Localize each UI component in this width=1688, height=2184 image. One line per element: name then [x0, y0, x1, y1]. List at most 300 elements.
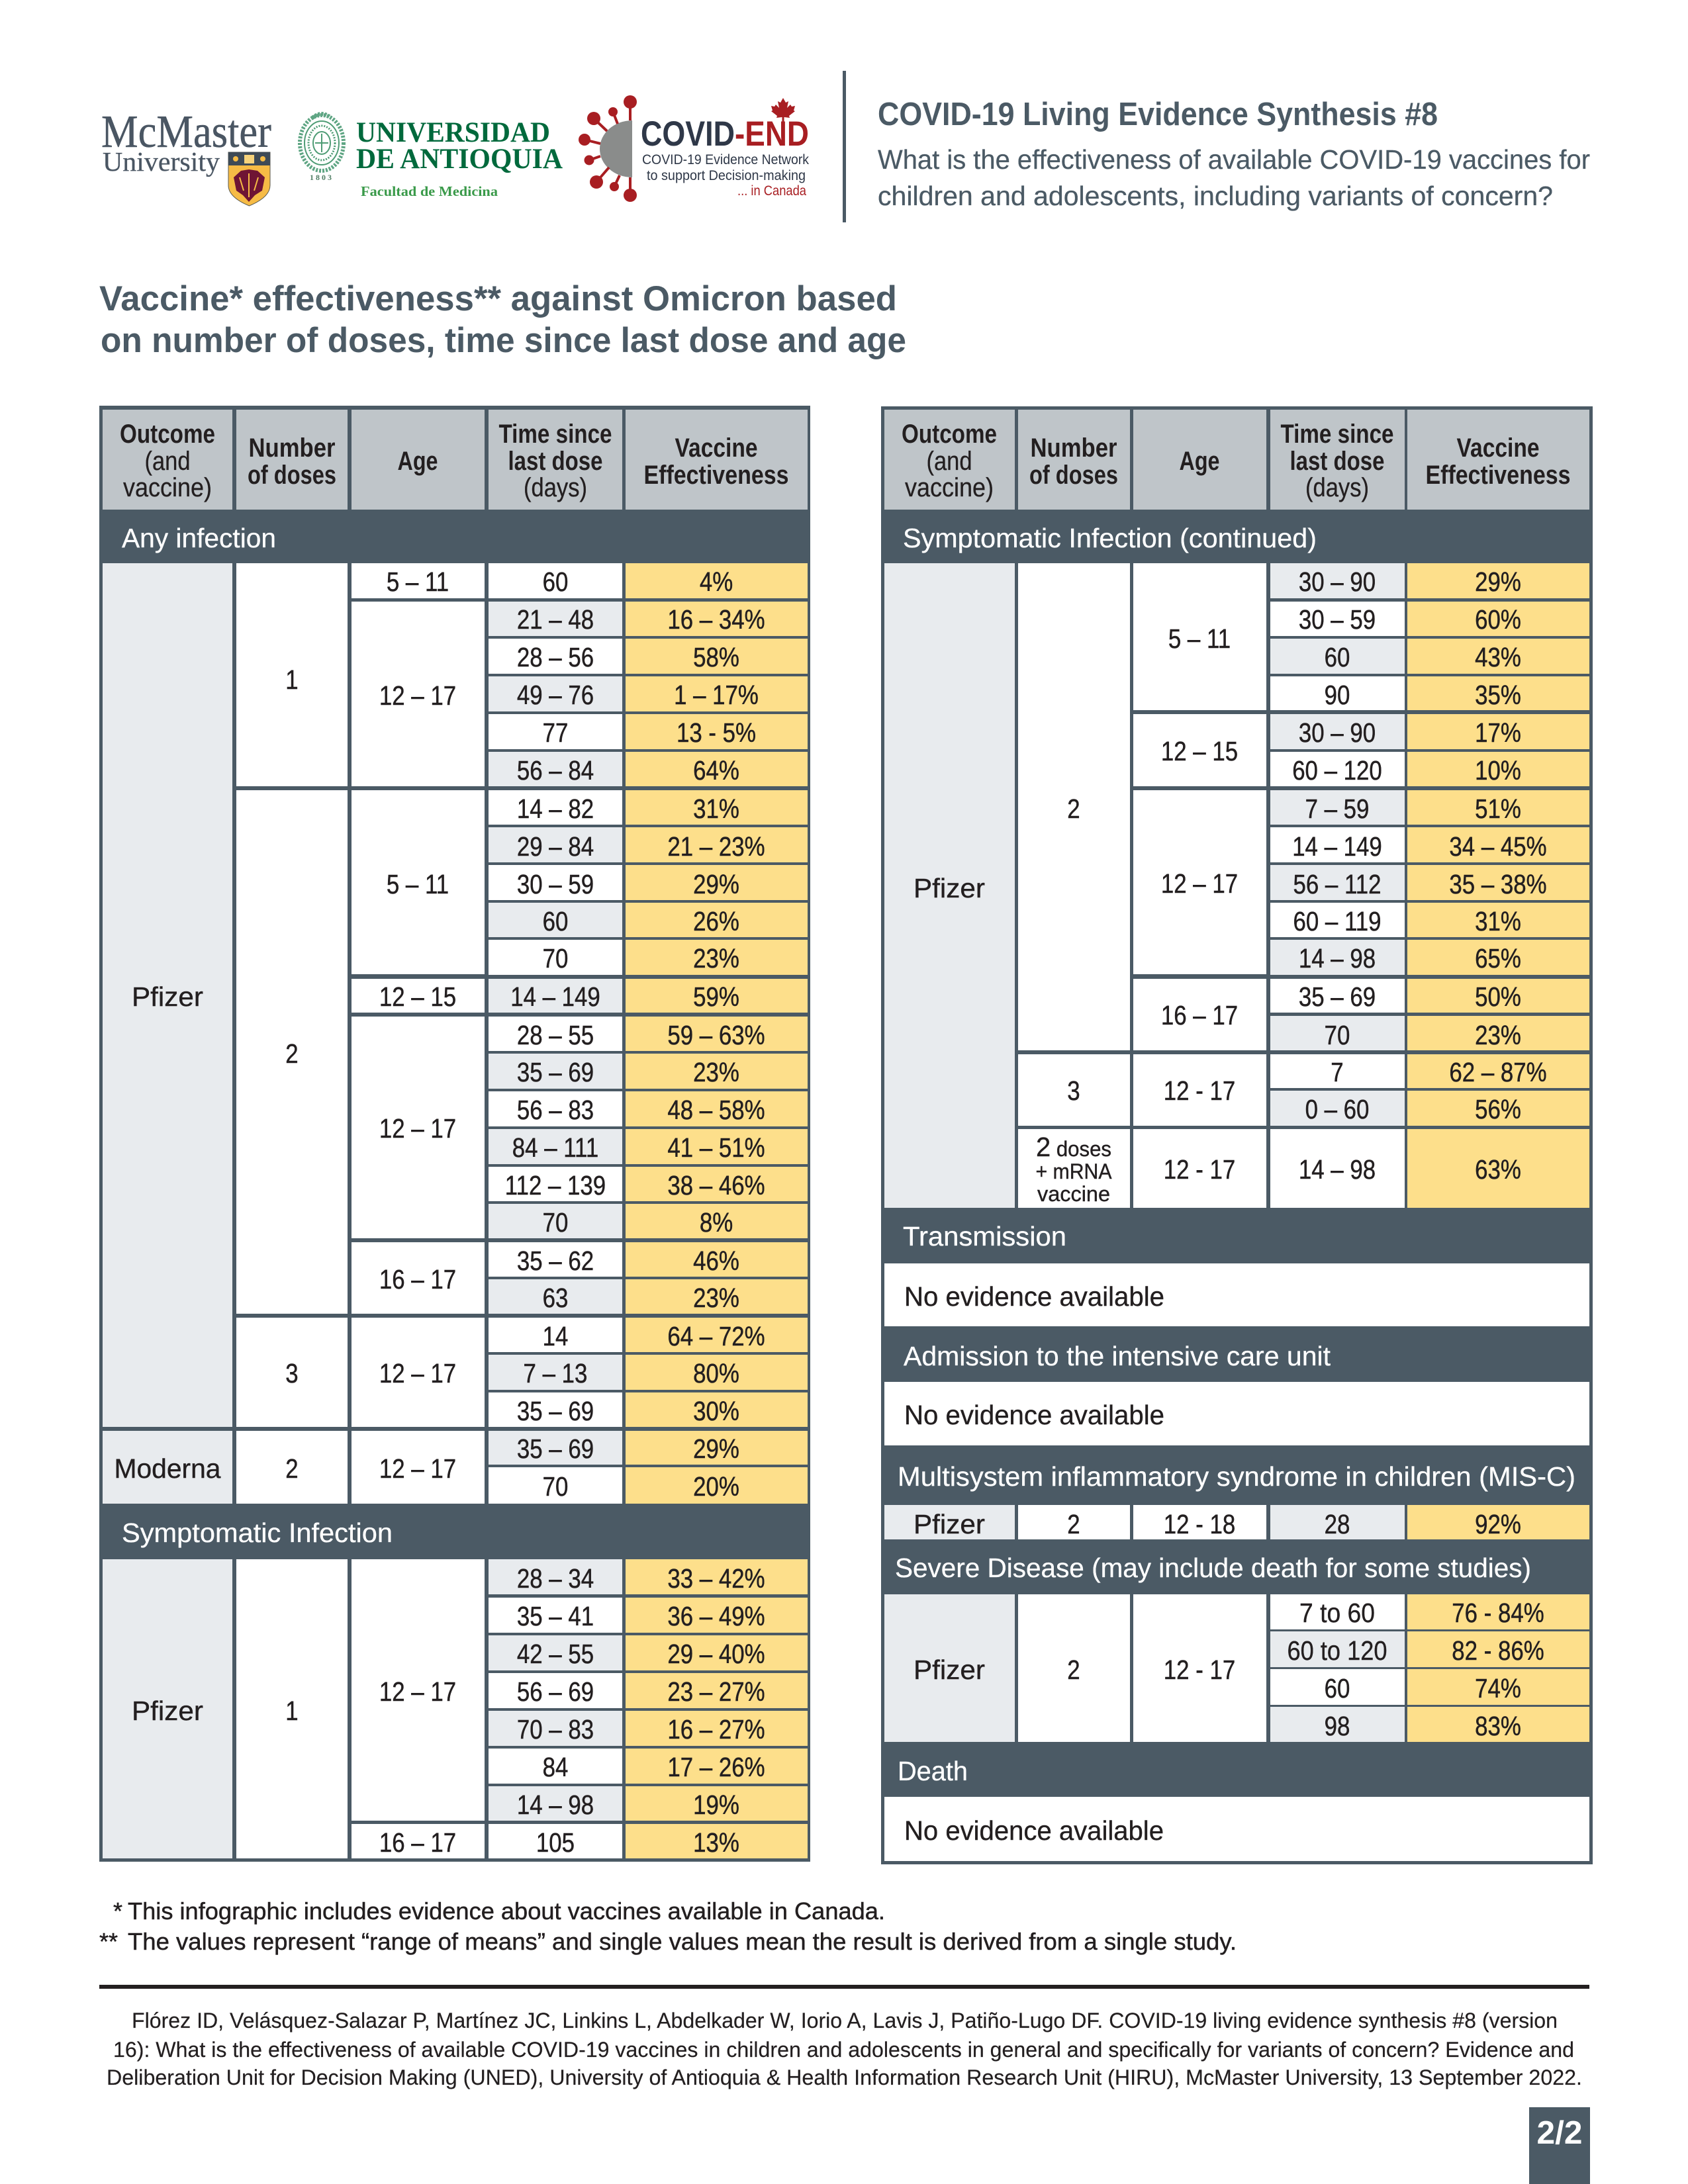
- doses cell: 2: 2: [285, 1039, 299, 1069]
- doses cell: 2 doses + mRNA vaccine: [1018, 1129, 1130, 1208]
- row: 14 – 98 days, 65%: [1270, 940, 1589, 975]
- age cell: 12 – 17: [352, 1318, 485, 1427]
- row: 14 – 149 days, 59%: [489, 979, 808, 1013]
- row: MIS-C Pfizer, 2 doses, 12 - 18, 28 days, 92%: 92%: [1475, 1510, 1521, 1540]
- age cell: 12 – 17: [352, 1017, 485, 1238]
- no evidence: transmission: [884, 1263, 1589, 1326]
- row: 35 – 69 days, 23%: [489, 1054, 808, 1089]
- table header row: (and: [144, 447, 191, 476]
- main heading: [99, 279, 906, 360]
- no evidence: transmission: No evidence available: [904, 1281, 1164, 1312]
- row: 7 to 60 days, 76 - 84%: 76 - 84%: [1452, 1598, 1544, 1629]
- row: 30 – 59 days, 29%: [489, 865, 808, 900]
- row: 7 – 59 days, 51%: [1270, 790, 1589, 825]
- row: 60 days, 43%: 43%: [1475, 643, 1521, 673]
- table header row: of doses: [248, 461, 336, 490]
- row: 14 – 82 days, 31%: [489, 790, 808, 825]
- doses cell: 2 doses + mRNA vaccine: vaccine: [1037, 1182, 1110, 1206]
- doses cell: 1: [236, 563, 348, 786]
- no evidence: death: [884, 1797, 1589, 1861]
- row: 35 – 69 days, 30%: [489, 1392, 808, 1427]
- row: 70 – 83 days, 16 – 27%: [489, 1711, 808, 1746]
- table header row: [103, 410, 808, 510]
- row: 35 – 69 days, 30%: 35 – 69: [517, 1396, 594, 1427]
- logo: COVID-END: ... in Canada: [737, 183, 806, 199]
- logo: Universidad de Antioquia: Facultad de Medicina: [361, 183, 498, 199]
- section band: Symptomatic Infection (continued): Symptomatic Infection (continued): [903, 523, 1317, 553]
- row: 35 – 41 days, 36 – 49%: 35 – 41: [517, 1602, 594, 1632]
- row: 28 – 55 days, 59 – 63%: 28 – 55: [517, 1021, 594, 1051]
- row: 14 – 82 days, 31%: 14 – 82: [517, 794, 594, 825]
- section band: Transmission: Transmission: [903, 1221, 1066, 1251]
- age cell: 12 – 15: [352, 979, 485, 1013]
- row: 60 to 120 days, 82 - 86%: [1270, 1631, 1589, 1667]
- age cell: 16 – 17: [352, 1824, 485, 1858]
- no evidence: ICU admission: No evidence available: [904, 1400, 1164, 1430]
- logo: McMaster University: University: [103, 146, 220, 177]
- row: 60 – 120 days, 10%: 60 – 120: [1292, 756, 1382, 786]
- row: 7 to 60 days, 76 - 84%: [1270, 1594, 1589, 1629]
- citation: 16): What is the effectiveness of available COVID-19 vaccines in children and adolescents in general and specifically for variants of concern? Evidence and: [113, 2038, 1574, 2062]
- doses cell: 3: [1018, 1054, 1130, 1126]
- doses cell: 2: [1018, 1594, 1130, 1742]
- doses cell: 2: 2: [1067, 794, 1080, 825]
- row: 60 days, 43%: 60: [1325, 643, 1350, 673]
- section band: Death: Death: [898, 1756, 968, 1786]
- panel: right table: [881, 406, 1593, 1864]
- row: 70 days, 23%: [1270, 1016, 1589, 1051]
- table header row: [884, 410, 1589, 510]
- age cell: 5 – 11: [352, 563, 485, 598]
- age cell: 16 – 17: 16 – 17: [379, 1828, 456, 1858]
- outcome cell: Pfizer, symptomatic: [103, 1559, 232, 1858]
- row: 29 – 84 days, 21 – 23%: [489, 827, 808, 862]
- row: 60 to 120 days, 82 - 86%: 82 - 86%: [1452, 1636, 1544, 1666]
- table header row: (and: [927, 447, 972, 476]
- section band: Admission to the intensive care unit: Admission to the intensive care unit: [904, 1341, 1331, 1371]
- row: 70 days, 23%: 70: [543, 944, 568, 974]
- outcome cell: Pfizer, any infection: Pfizer: [132, 981, 203, 1012]
- doses cell: 2: [1018, 563, 1130, 1050]
- doses cell: 1: 1: [285, 665, 299, 696]
- row: Moderna 35 – 69 days, 29%: [489, 1431, 808, 1465]
- doses cell: 2 doses + mRNA vaccine: + mRNA: [1035, 1160, 1112, 1183]
- row: 60 – 119 days, 31%: [1270, 903, 1589, 937]
- row: 60 days, 74%: 74%: [1475, 1674, 1521, 1704]
- row: 60 days, 26%: [489, 903, 808, 937]
- row: 63 days, 23%: 63: [543, 1283, 568, 1314]
- row: 30 – 90 days, 17%: 30 – 90: [1299, 718, 1376, 749]
- row: 49 – 76 days, 1 – 17%: 1 – 17%: [674, 680, 759, 711]
- row: 35 – 62 days, 46%: [489, 1242, 808, 1277]
- section band: Severe Disease: Severe Disease (may include death for some studies): [895, 1553, 1531, 1583]
- row: 35 – 69 days, 30%: 30%: [693, 1396, 739, 1427]
- table header row: (days): [524, 473, 587, 502]
- doses cell: 1: [236, 1559, 348, 1858]
- row: 14 – 149 days, 34 – 45%: 34 – 45%: [1449, 832, 1547, 862]
- row: Moderna 35 – 69 days, 29%: 29%: [693, 1434, 739, 1465]
- row: 56 – 69 days, 23 – 27%: 23 – 27%: [667, 1677, 765, 1707]
- row: 70 days, 8%: 8%: [700, 1208, 733, 1238]
- page number badge: 2/2: [1537, 2115, 1582, 2151]
- table header row: vaccine): [123, 473, 212, 502]
- row: 7 days, 62 – 87%: 7: [1331, 1058, 1344, 1088]
- header: synthesis title and question: [878, 97, 1590, 211]
- no evidence: ICU admission: [884, 1382, 1589, 1445]
- row: 14 – 98 days, 65%: 14 – 98: [1299, 944, 1376, 974]
- row: 14 – 98 days, 65%: 65%: [1475, 944, 1521, 974]
- doses cell: Moderna 2: [236, 1431, 348, 1504]
- section band: Any infection: Any infection: [122, 523, 276, 553]
- row: 7 – 59 days, 51%: 51%: [1475, 794, 1521, 825]
- doses cell: 3: [236, 1318, 348, 1427]
- row: 0 – 60 days, 56%: 0 – 60: [1305, 1095, 1369, 1125]
- table header row: Effectiveness: [1426, 461, 1570, 490]
- row: 56 – 83 days, 48 – 58%: 56 – 83: [517, 1095, 594, 1126]
- row: 84 – 111 days, 41 – 51%: 41 – 51%: [667, 1133, 765, 1163]
- footnotes: The values represent “range of means” and single values mean the result is derived from a single study.: [128, 1928, 1237, 1955]
- section band: Symptomatic Infection: Symptomatic Infection: [122, 1518, 393, 1548]
- age cell: 12 – 15: 12 – 15: [379, 982, 456, 1013]
- row: 112 – 139 days, 38 – 46%: 112 – 139: [505, 1171, 606, 1201]
- age cell: 12 – 17: [1133, 1054, 1266, 1126]
- outcome cell: Pfizer, any infection: [103, 563, 232, 1427]
- outcome cell: Moderna: Moderna: [114, 1453, 221, 1484]
- row: 98 days, 83%: 98: [1325, 1711, 1350, 1742]
- row: MIS-C Pfizer, 2 doses, 12 - 18, 28 days, 92%: 12 - 18: [1164, 1510, 1235, 1540]
- doses cell: Moderna 2: 2: [285, 1454, 299, 1484]
- row: 35 – 41 days, 36 – 49%: 36 – 49%: [667, 1602, 765, 1632]
- age cell: 16 – 17: [352, 1242, 485, 1314]
- row: 56 – 83 days, 48 – 58%: 48 – 58%: [667, 1095, 765, 1126]
- age cell: 12 - 17: 12 - 17: [1164, 1655, 1235, 1686]
- row: 84 – 111 days, 41 – 51%: [489, 1129, 808, 1164]
- row: 28 – 56 days, 58%: 28 – 56: [517, 643, 594, 673]
- row: 90 days, 35%: 90: [1325, 680, 1350, 711]
- row: 105 days, 13%: 13%: [693, 1828, 739, 1858]
- logo: COVID-END: to support Decision-making: [647, 168, 806, 183]
- table header row: Outcome: [902, 420, 997, 449]
- row: 105 days, 13%: [489, 1824, 808, 1858]
- footnotes: *: [113, 1897, 122, 1925]
- page number badge: [1529, 2107, 1590, 2184]
- row: 21 – 48 days, 16 – 34%: 16 – 34%: [667, 605, 765, 635]
- section band: MIS-C: Multisystem inflammatory syndrome in children (MIS-C): [898, 1461, 1575, 1492]
- row: 84 days, 17 – 26%: 84: [543, 1752, 568, 1783]
- row: 70 – 83 days, 16 – 27%: 16 – 27%: [667, 1715, 765, 1745]
- row: 14 – 149 days, 34 – 45%: [1270, 827, 1589, 862]
- header: synthesis title and question: COVID-19 Living Evidence Synthesis #8: [878, 97, 1438, 132]
- no evidence: death: No evidence available: [904, 1815, 1164, 1846]
- logo: COVID-END: [579, 95, 809, 202]
- outcome cell: Pfizer, severe disease: [884, 1594, 1015, 1742]
- row: 56 – 83 days, 48 – 58%: [489, 1091, 808, 1126]
- row: 28 – 55 days, 59 – 63%: 59 – 63%: [667, 1021, 765, 1051]
- doses cell: 1: 1: [285, 1696, 299, 1727]
- row: 60 days, 4%: [489, 563, 808, 598]
- age cell: 12 – 17: [1133, 1129, 1266, 1208]
- row: 35 – 69 days, 50%: 50%: [1475, 982, 1521, 1013]
- row: 30 – 59 days, 60%: 60%: [1475, 605, 1521, 635]
- row: 42 – 55 days, 29 – 40%: 42 – 55: [517, 1639, 594, 1670]
- row: 60 days, 74%: [1270, 1669, 1589, 1705]
- age cell: 12 – 17: 12 – 17: [379, 1359, 456, 1389]
- row: 70 days, 23%: [489, 940, 808, 975]
- row: 28 – 34 days, 33 – 42%: 33 – 42%: [667, 1564, 765, 1594]
- logos row: [101, 95, 809, 206]
- row: 14 – 98 days, 19%: [489, 1786, 808, 1821]
- logo: Universidad de Antioquia: 1803: [310, 173, 334, 182]
- header: synthesis title and question: What is the effectiveness of available COVID-19 vaccines for: [878, 144, 1590, 175]
- row: 28 – 34 days, 33 – 42%: 28 – 34: [517, 1564, 594, 1594]
- age cell: 5 – 11: 5 – 11: [387, 870, 449, 900]
- header: synthesis title and question: children and adolescents, including variants of concern?: [878, 181, 1553, 211]
- age cell: 5 – 11: [1133, 563, 1266, 710]
- footnotes: **: [99, 1928, 118, 1955]
- row: 42 – 55 days, 29 – 40%: [489, 1635, 808, 1670]
- row: 70 days, 8%: [489, 1204, 808, 1238]
- logo: COVID-END: COVID-19 Evidence Network: [642, 152, 809, 167]
- row: 60 days, 4%: 60: [543, 567, 568, 598]
- row: 35 – 62 days, 46%: 35 – 62: [517, 1246, 594, 1277]
- row: 14 – 149 days, 59%: 14 – 149: [510, 982, 600, 1013]
- row: 28 – 56 days, 58%: 58%: [693, 643, 739, 673]
- age cell: 12 – 15: [1133, 714, 1266, 786]
- row: 49 – 76 days, 1 – 17%: 49 – 76: [517, 680, 594, 711]
- logo: Universidad de Antioquia: DE ANTIOQUIA: [356, 144, 563, 175]
- row: 30 – 90 days, 29%: [1270, 563, 1589, 598]
- main heading: on number of doses, time since last dose and age: [101, 321, 906, 360]
- row: 7 – 13 days, 80%: 7 – 13: [524, 1359, 587, 1389]
- row: Moderna 70 days, 20%: 20%: [693, 1472, 739, 1502]
- age cell: 12 – 17: [1133, 790, 1266, 974]
- row: 35 – 69 days, 23%: 23%: [693, 1058, 739, 1088]
- row: 14 days, 64 – 72%: 64 – 72%: [667, 1322, 765, 1352]
- row: 70 days, 23%: 23%: [693, 944, 739, 974]
- row: 30 – 90 days, 29%: 30 – 90: [1299, 567, 1376, 598]
- logo: McMaster University: McMaster: [101, 107, 271, 158]
- row: 60 to 120 days, 82 - 86%: 60 to 120: [1287, 1635, 1387, 1666]
- logo: McMaster University: [101, 107, 271, 206]
- age cell: 5 – 11: 5 – 11: [1168, 624, 1231, 655]
- age cell: 12 – 17: 12 – 17: [1161, 869, 1238, 899]
- outcome cell: Pfizer, symptomatic: Pfizer: [132, 1696, 203, 1726]
- row: 30 – 59 days, 29%: 29%: [693, 870, 739, 900]
- row: 90 days, 35%: 35%: [1475, 680, 1521, 711]
- row: 30 – 59 days, 60%: 30 – 59: [1299, 605, 1376, 635]
- row: 77 days, 13 - 5%: 77: [543, 718, 568, 749]
- citation: [107, 2009, 1582, 2089]
- row: 98 days, 83%: 83%: [1475, 1711, 1521, 1742]
- row: 60 days, 74%: 60: [1325, 1674, 1350, 1704]
- row: 98 days, 83%: [1270, 1707, 1589, 1742]
- outcome cell: Pfizer, severe disease: Pfizer: [914, 1655, 985, 1685]
- footnotes: This infographic includes evidence about vaccines available in Canada.: [128, 1897, 885, 1925]
- row: 28 – 55 days, 59 – 63%: [489, 1017, 808, 1051]
- age cell: 12 – 17: [352, 602, 485, 786]
- row: 14 – 149 days, 34 – 45%: 14 – 149: [1292, 832, 1382, 862]
- row: 30 – 90 days, 17%: [1270, 714, 1589, 749]
- row: 35 – 69 days, 50%: [1270, 979, 1589, 1013]
- row: 14 – 98 days, 63%: 14 – 98: [1299, 1155, 1376, 1185]
- footnotes: [99, 1897, 1237, 1955]
- row: 77 days, 13 - 5%: [489, 714, 808, 749]
- age cell: 12 – 17: 12 – 17: [379, 1114, 456, 1144]
- row: 56 – 84 days, 64%: 56 – 84: [517, 756, 594, 786]
- table header row: Time since: [1280, 420, 1394, 449]
- age cell: 12 - 17: [1133, 1594, 1266, 1742]
- row: 105 days, 13%: 105: [536, 1828, 575, 1858]
- outcome cell: Moderna: [103, 1431, 232, 1504]
- row: 30 – 59 days, 60%: [1270, 602, 1589, 636]
- row: 84 days, 17 – 26%: 17 – 26%: [667, 1752, 765, 1783]
- row: Moderna 70 days, 20%: 70: [543, 1472, 568, 1502]
- table header row: Number: [1030, 433, 1117, 463]
- row: 7 – 59 days, 51%: 7 – 59: [1305, 794, 1369, 825]
- doses cell: 2: 2: [1067, 1655, 1080, 1686]
- row: 60 days, 26%: 26%: [693, 907, 739, 937]
- table header row: Time since: [499, 420, 612, 449]
- row: 14 days, 64 – 72%: [489, 1318, 808, 1352]
- row: 70 days, 23%: 70: [1325, 1021, 1350, 1051]
- row: 35 – 69 days, 50%: 35 – 69: [1299, 982, 1376, 1013]
- table header row: Number: [249, 433, 335, 463]
- row: 60 – 119 days, 31%: 60 – 119: [1293, 907, 1382, 937]
- row: 21 – 48 days, 16 – 34%: 21 – 48: [517, 605, 594, 635]
- row: 30 – 90 days, 29%: 29%: [1475, 567, 1521, 598]
- row: 56 – 112 days, 35 – 38%: 35 – 38%: [1449, 870, 1547, 900]
- row: 28 – 34 days, 33 – 42%: [489, 1559, 808, 1594]
- row: 90 days, 35%: [1270, 676, 1589, 711]
- row: 14 – 98 days, 63%: 63%: [1475, 1155, 1521, 1185]
- row: 29 – 84 days, 21 – 23%: 21 – 23%: [667, 832, 765, 862]
- age cell: 16 – 17: 16 – 17: [379, 1265, 456, 1295]
- row: 7 to 60 days, 76 - 84%: 7 to 60: [1299, 1598, 1375, 1628]
- row: 56 – 69 days, 23 – 27%: [489, 1673, 808, 1708]
- row: 7 days, 62 – 87%: [1270, 1054, 1589, 1088]
- row: 28 – 56 days, 58%: [489, 639, 808, 674]
- row: 60 days, 26%: 60: [543, 907, 568, 937]
- age cell: 12 – 17: 12 – 17: [379, 681, 456, 711]
- table header row: Effectiveness: [643, 461, 789, 490]
- row: MIS-C Pfizer, 2 doses, 12 - 18, 28 days, 92%: Pfizer: [914, 1509, 985, 1539]
- row: 56 – 112 days, 35 – 38%: 56 – 112: [1293, 870, 1382, 900]
- row: Moderna 70 days, 20%: [489, 1467, 808, 1504]
- age cell: 12 – 17: [352, 1559, 485, 1821]
- row: MIS-C Pfizer, 2 doses, 12 - 18, 28 days, 92%: 2: [1067, 1510, 1080, 1540]
- logo: Universidad de Antioquia: [300, 114, 563, 199]
- table header row: Outcome: [120, 420, 215, 449]
- citation: Flórez ID, Velásquez-Salazar P, Martínez JC, Linkins L, Abdelkader W, Iorio A, Lavis J, Patiño-Lugo DF. COVID-19 living evidence synthesis #8 (version: [132, 2009, 1558, 2032]
- table header row: vaccine): [905, 473, 994, 502]
- doses cell: 2 doses + mRNA vaccine: 2 doses: [1036, 1132, 1111, 1162]
- row: 60 – 120 days, 10%: 10%: [1475, 756, 1521, 786]
- row: 7 days, 62 – 87%: 62 – 87%: [1449, 1058, 1547, 1088]
- row: 7 – 13 days, 80%: 80%: [693, 1359, 739, 1389]
- logo: COVID-END: COVID: [641, 114, 735, 154]
- row: 14 – 98 days, 19%: 14 – 98: [517, 1790, 594, 1821]
- row: MIS-C Pfizer, 2 doses, 12 - 18, 28 days, 92%: [884, 1505, 1589, 1540]
- row: 60 days, 4%: 4%: [700, 567, 733, 598]
- table header row: of doses: [1029, 461, 1118, 490]
- outcome cell: Pfizer: Pfizer: [914, 873, 985, 903]
- row: 56 – 69 days, 23 – 27%: 56 – 69: [517, 1677, 594, 1707]
- row: Moderna 35 – 69 days, 29%: 35 – 69: [517, 1434, 594, 1465]
- row: MIS-C Pfizer, 2 doses, 12 - 18, 28 days, 92%: 28: [1325, 1510, 1350, 1540]
- row: 30 – 90 days, 17%: 17%: [1475, 718, 1521, 749]
- age cell: 5 – 11: 5 – 11: [387, 567, 449, 598]
- table header row: Age: [1180, 447, 1219, 476]
- row: 0 – 60 days, 56%: 56%: [1475, 1095, 1521, 1125]
- citation: Deliberation Unit for Decision Making (UNED), University of Antioquia & Health Information Research Unit (HIRU), McMaster University, 13 September 2022.: [107, 2066, 1582, 2089]
- age cell: Moderna 12 – 17: [352, 1431, 485, 1504]
- row: 56 – 112 days, 35 – 38%: [1270, 865, 1589, 900]
- doses cell: 3: 3: [285, 1359, 299, 1389]
- row: 70 days, 23%: 23%: [1475, 1021, 1521, 1051]
- row: 84 – 111 days, 41 – 51%: 84 – 111: [512, 1133, 598, 1163]
- row: 112 – 139 days, 38 – 46%: [489, 1167, 808, 1201]
- row: 14 – 98 days, 19%: 19%: [693, 1790, 739, 1821]
- table header row: Vaccine: [1456, 433, 1540, 463]
- row: 14 – 82 days, 31%: 31%: [693, 794, 739, 825]
- panel: left table: [99, 406, 810, 1862]
- row: 7 – 13 days, 80%: [489, 1355, 808, 1390]
- row: 77 days, 13 - 5%: 13 - 5%: [677, 718, 756, 749]
- doses cell: 3: 3: [1067, 1076, 1080, 1107]
- table header row: Age: [397, 447, 438, 476]
- row: 14 – 98 days, 63%: [1270, 1129, 1589, 1208]
- row: 70 days, 8%: 70: [543, 1208, 568, 1238]
- age cell: 16 – 17: [1133, 979, 1266, 1050]
- outcome cell: Pfizer: [884, 563, 1015, 1208]
- row: 63 days, 23%: 23%: [693, 1283, 739, 1314]
- row: 84 days, 17 – 26%: [489, 1749, 808, 1784]
- doses cell: 2: [236, 790, 348, 1314]
- row: 70 – 83 days, 16 – 27%: 70 – 83: [517, 1715, 594, 1745]
- age cell: 12 – 17: 12 – 17: [379, 1677, 456, 1707]
- age cell: 16 – 17: 16 – 17: [1161, 1001, 1238, 1031]
- age cell: 5 – 11: [352, 790, 485, 974]
- row: 56 – 84 days, 64%: 64%: [693, 756, 739, 786]
- logo: COVID-END: -END: [735, 114, 809, 154]
- age cell: 12 – 17: 12 - 17: [1164, 1076, 1235, 1107]
- row: 49 – 76 days, 1 – 17%: [489, 676, 808, 711]
- row: 21 – 48 days, 16 – 34%: [489, 602, 808, 636]
- age cell: 12 – 17: 12 - 17: [1164, 1155, 1235, 1185]
- table header row: last dose: [508, 447, 602, 476]
- age cell: 12 – 15: 12 – 15: [1161, 737, 1238, 767]
- row: 14 – 149 days, 59%: 59%: [693, 982, 739, 1013]
- row: 60 – 120 days, 10%: [1270, 752, 1589, 786]
- main heading: Vaccine* effectiveness** against Omicron based: [99, 279, 897, 318]
- logo: Universidad de Antioquia: UNIVERSIDAD: [356, 117, 550, 148]
- row: 30 – 59 days, 29%: 30 – 59: [517, 870, 594, 900]
- row: 60 days, 43%: [1270, 639, 1589, 674]
- row: 112 – 139 days, 38 – 46%: 38 – 46%: [667, 1171, 765, 1201]
- row: 14 days, 64 – 72%: 14: [543, 1322, 568, 1352]
- row: 35 – 69 days, 23%: 35 – 69: [517, 1058, 594, 1088]
- age cell: Moderna 12 – 17: 12 – 17: [379, 1454, 456, 1484]
- row: 35 – 62 days, 46%: 46%: [693, 1246, 739, 1277]
- row: 56 – 84 days, 64%: [489, 752, 808, 786]
- row: 35 – 41 days, 36 – 49%: [489, 1598, 808, 1633]
- row: 29 – 84 days, 21 – 23%: 29 – 84: [517, 832, 594, 862]
- row: 0 – 60 days, 56%: [1270, 1091, 1589, 1126]
- table header row: (days): [1305, 473, 1369, 502]
- table header row: Vaccine: [675, 433, 757, 463]
- table header row: last dose: [1289, 447, 1385, 476]
- row: 60 – 119 days, 31%: 31%: [1475, 907, 1521, 937]
